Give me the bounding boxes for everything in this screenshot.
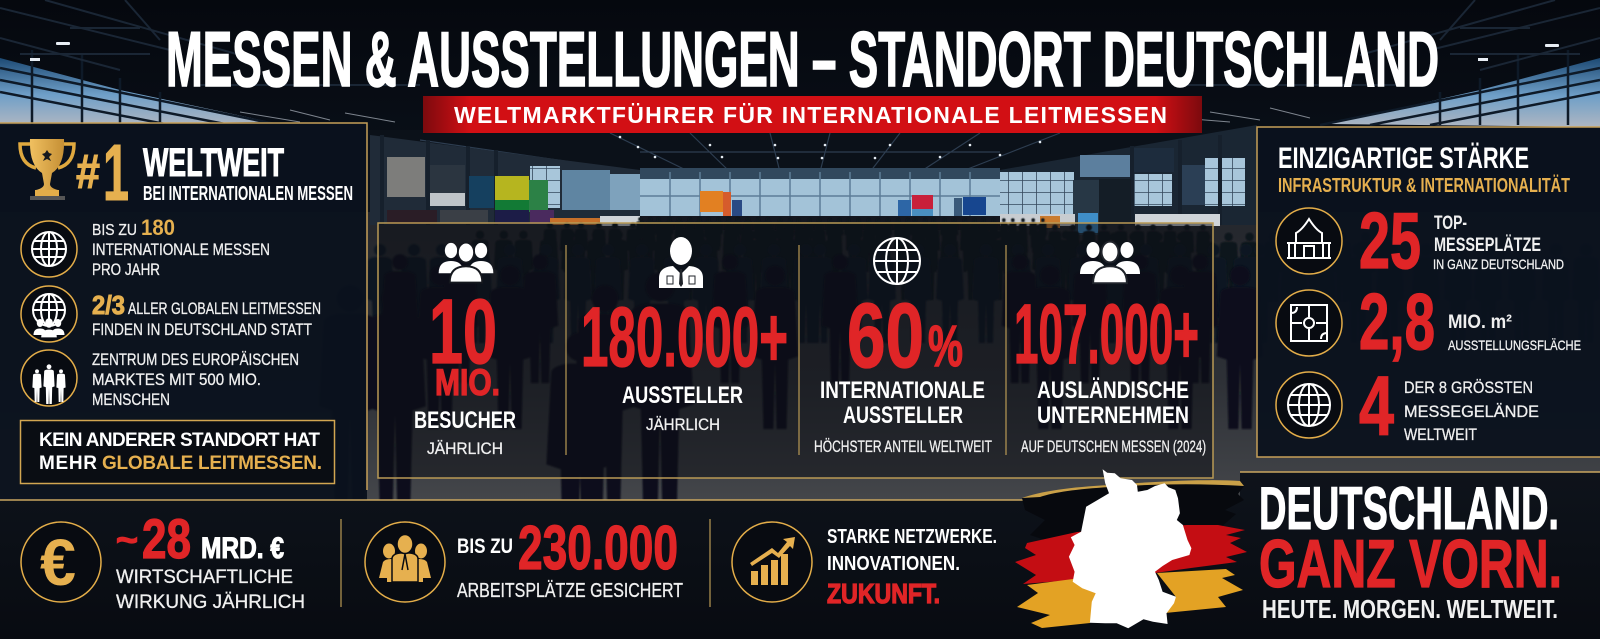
item: 2/3 Leitmessen: ALLER GLOBALEN LEITMESSEN (128, 299, 321, 318)
icon: foreign companies group (1080, 242, 1140, 283)
subtitle banner (423, 96, 1202, 133)
stat: 60% internationale Aussteller: INTERNATIONALE (820, 377, 985, 404)
item: europäischer Markt: ZENTRUM DES EUROPÄISCHEN (92, 350, 299, 369)
stat: 107.000+ ausländische Unternehmen: AUSLÄNDISCHE (1037, 377, 1189, 404)
icon: floor plan (1276, 290, 1342, 356)
item: 180 Messen: PRO JAHR (92, 260, 160, 279)
stat: 60% internationale Aussteller (814, 238, 992, 456)
item: 2/3 Leitmessen: 2/3 (92, 290, 125, 320)
icon: visitors group (439, 242, 493, 282)
panel: central statistics (378, 223, 1213, 478)
icon: trophy (20, 139, 74, 200)
stat: 60% internationale Aussteller: % (928, 314, 963, 379)
far crowd (470, 217, 1398, 302)
icon: growth chart (732, 522, 812, 602)
stat: 60% internationale Aussteller: HÖCHSTER ANTEIL WELTWEIT (814, 437, 992, 456)
stat: 107.000+ ausländische Unternehmen (1014, 242, 1206, 456)
item: 4 der 8 größten: 4 (1359, 359, 1394, 453)
icon: globe (874, 238, 920, 284)
stat: 10 Mio. Besucher: 10 (429, 281, 497, 383)
stat: 180.000+ Aussteller: 180.000+ (581, 290, 788, 384)
stat: 230.000 Arbeitsplätze: ARBEITSPLÄTZE GESICHERT (457, 580, 683, 602)
item: europäischer Markt: MARKTES MIT 500 MIO. (92, 370, 261, 389)
stat: Netzwerke Innovationen Zukunft (732, 522, 997, 609)
stat: 180.000+ Aussteller: AUSSTELLER (622, 382, 743, 409)
stat: Netzwerke Innovationen Zukunft: INNOVATIONEN. (827, 553, 960, 575)
icon: globe (21, 221, 77, 277)
item: 4 der 8 größten: DER 8 GRÖSSTEN (1404, 378, 1533, 397)
item: europäischer Markt (21, 350, 299, 409)
stat: 230.000 Arbeitsplätze: 230.000 (518, 514, 678, 583)
callout: Kein anderer Standort: GLOBALE LEITMESSEN. (102, 453, 322, 474)
item: 2/3 Leitmessen: FINDEN IN DEUTSCHLAND STATT (92, 320, 312, 339)
stat: 180.000+ Aussteller (581, 237, 788, 434)
stat: 230.000 Arbeitsplätze (365, 514, 683, 602)
stat: 28 Mrd. Euro: WIRTSCHAFTLICHE (116, 567, 293, 588)
windows left wall (530, 166, 560, 208)
item: 25 Messeplätze (1276, 196, 1564, 285)
icon: euro (21, 522, 101, 602)
item: 2,8 Mio. m²: MIO. m² (1448, 312, 1512, 333)
stat: 28 Mrd. Euro: ~ (116, 519, 138, 560)
windows right wall (1000, 172, 1074, 214)
item: 180 Messen: BIS ZU (92, 222, 137, 239)
stat: 230.000 Arbeitsplätze: BIS ZU (457, 535, 513, 558)
stat: 28 Mrd. Euro (21, 507, 305, 613)
subtitle banner: WELTMARKTFÜHRER FÜR INTERNATIONALE LEITMESSEN (454, 102, 1167, 128)
panel: bottom strip (0, 472, 1600, 639)
stat: 28 Mrd. Euro: 28 (142, 507, 191, 570)
stat: Netzwerke Innovationen Zukunft: ZUKUNFT. (827, 578, 940, 609)
item: 25 Messeplätze: TOP- (1434, 213, 1467, 234)
item: 2,8 Mio. m²: 2,8 (1359, 277, 1435, 366)
item: 4 der 8 größten: WELTWEIT (1404, 425, 1477, 444)
icon: workforce (365, 522, 445, 602)
callout: Kein anderer Standort (20, 420, 334, 484)
item: 4 der 8 größten: MESSEGELÄNDE (1404, 402, 1539, 421)
stat: 107.000+ ausländische Unternehmen: 107.000+ (1014, 287, 1199, 381)
icon: three people (21, 350, 77, 406)
stat: 10 Mio. Besucher: BESUCHER (414, 407, 516, 434)
stat: 10 Mio. Besucher: MIO. (435, 362, 500, 403)
icon: German flag brush and map (1015, 469, 1247, 628)
heading: #1 weltweit: WELTWEIT (143, 141, 284, 185)
stat: Netzwerke Innovationen Zukunft: STARKE NETZWERKE. (827, 526, 997, 548)
item: europäischer Markt: MENSCHEN (92, 390, 170, 409)
icon: exhibition hall building (1276, 208, 1342, 274)
item: 2,8 Mio. m² (1276, 277, 1581, 366)
stat: 10 Mio. Besucher: JÄHRLICH (427, 439, 503, 458)
item: 180 Messen: INTERNATIONALE MESSEN (92, 240, 270, 259)
stat: 28 Mrd. Euro: MRD. € (201, 532, 284, 565)
heading: #1 weltweit (76, 128, 353, 217)
item: 180 Messen (21, 215, 270, 279)
callout: Kein anderer Standort: KEIN ANDERER STANDORT HAT (39, 430, 320, 451)
stat: 180.000+ Aussteller: JÄHRLICH (646, 415, 720, 434)
icon: euro: € (40, 525, 76, 599)
stat: 28 Mrd. Euro: WIRKUNG JÄHRLICH (116, 592, 305, 613)
stat: 10 Mio. Besucher (414, 242, 516, 458)
item: 2/3 Leitmessen (21, 286, 321, 342)
heading: #1 weltweit: # (76, 146, 100, 199)
stat: 107.000+ ausländische Unternehmen: UNTERNEHMEN (1037, 402, 1189, 429)
icon: globe (1276, 372, 1342, 438)
heading: #1 weltweit: 1 (103, 128, 129, 217)
icon: exhibitor (659, 237, 703, 288)
item: 25 Messeplätze: IN GANZ DEUTSCHLAND (1433, 256, 1564, 272)
panel: Weltweit #1 (0, 123, 367, 500)
item: 25 Messeplätze: MESSEPLÄTZE (1434, 235, 1541, 256)
panel: einzigartige Stärke (1257, 127, 1600, 457)
stat: 107.000+ ausländische Unternehmen: AUF DEUTSCHEN MESSEN (2024) (1021, 437, 1206, 456)
heading: #1 weltweit: BEI INTERNATIONALEN MESSEN (143, 183, 353, 205)
stat: 60% internationale Aussteller: AUSSTELLER (843, 402, 963, 429)
icon: globe with people (21, 286, 77, 342)
item: 4 der 8 größten (1276, 359, 1539, 453)
slogan: Deutschland ganz vorn (1259, 475, 1562, 624)
item: 180 Messen: 180 (141, 215, 175, 240)
stat: 60% internationale Aussteller: 60 (847, 285, 924, 387)
item: 25 Messeplätze: 25 (1359, 196, 1421, 285)
callout: Kein anderer Standort: MEHR (39, 453, 97, 474)
